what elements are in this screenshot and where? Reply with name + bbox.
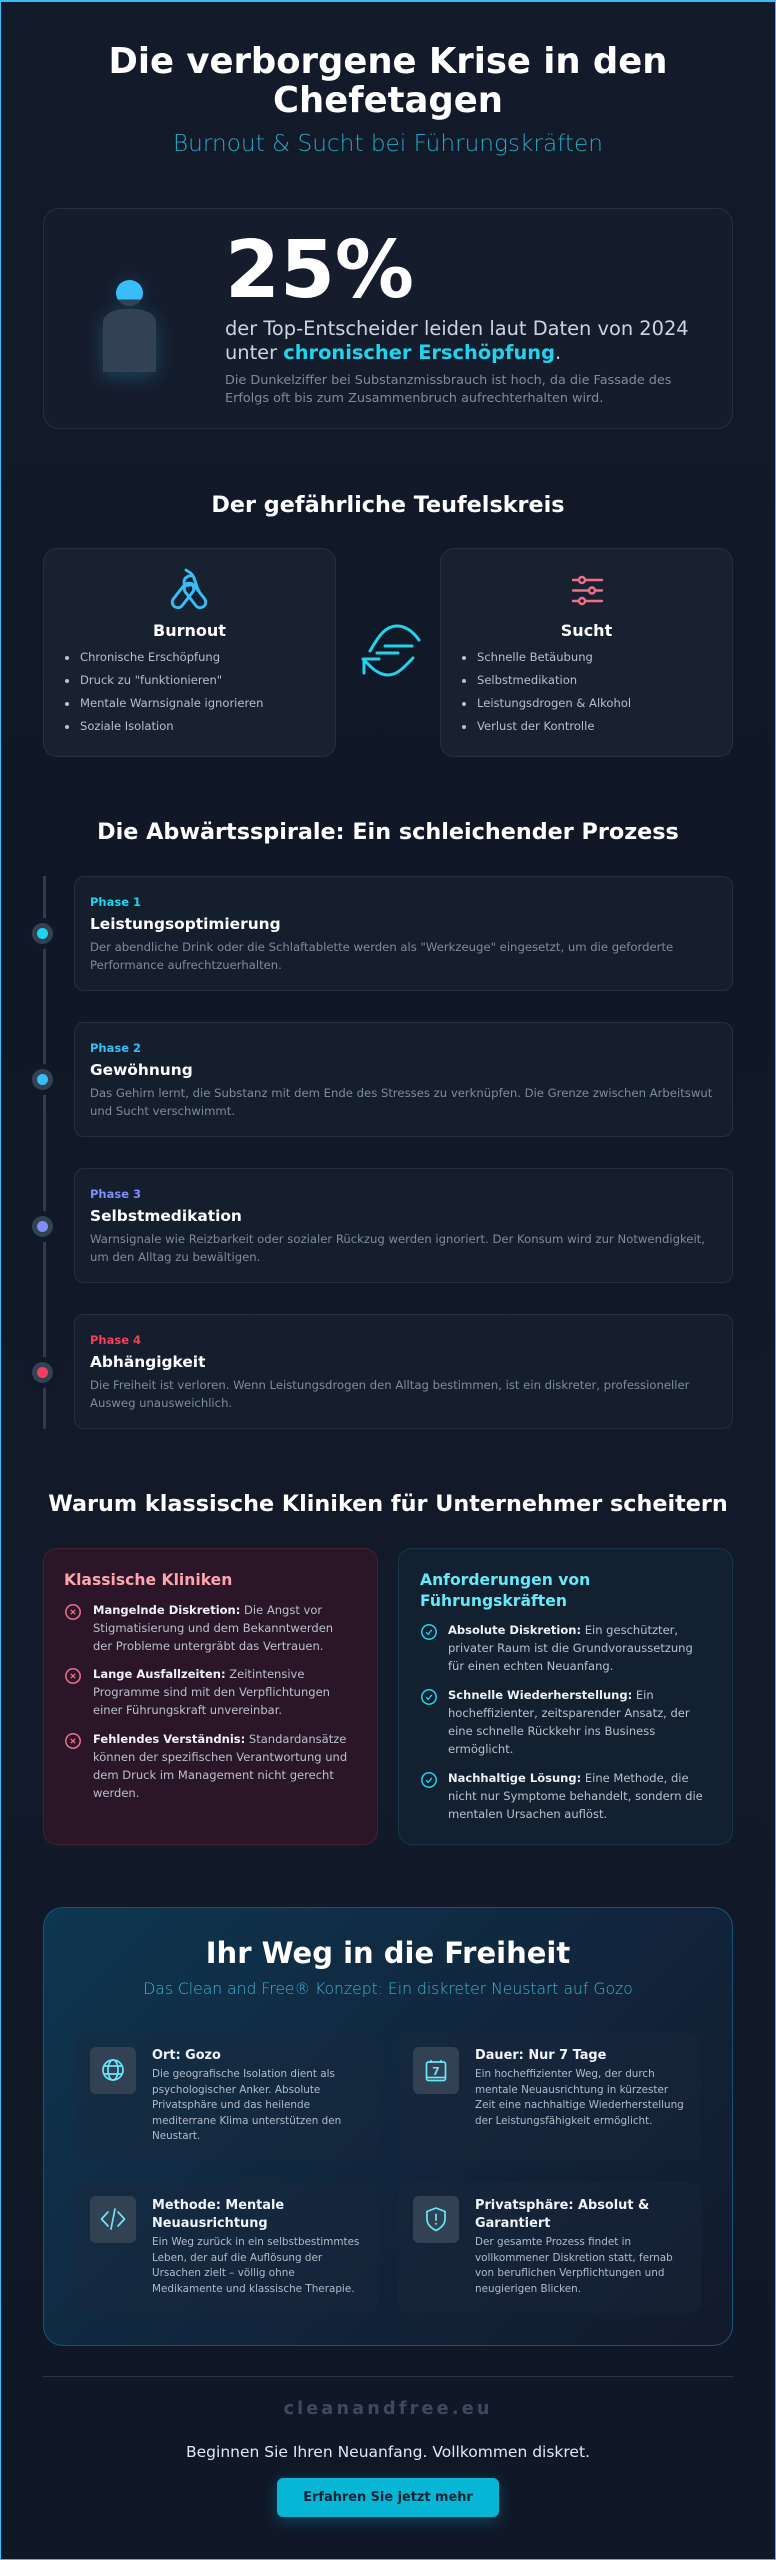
item: Diskretion: Mangelnde Diskretion: Die Angst vor [93, 1603, 322, 1617]
item: Diskretion: privater Raum ist die Grundvoraussetzung [448, 1641, 693, 1655]
Dauer text [475, 2068, 684, 2126]
item: Diskretion: Absolute Diskretion: Ein geschützter, [448, 1623, 678, 1637]
Privatsphäre title: Garantiert [475, 2216, 550, 2231]
panel: phase 2 [74, 1022, 733, 1137]
statistic text [225, 317, 689, 364]
heading: Abwärtsspirale: Die Abwärtsspirale: Ein schleichender Prozess [97, 819, 679, 845]
title [109, 41, 667, 120]
Methode title: Methode: Mentale [152, 2198, 284, 2213]
panel: hero statistic [43, 208, 733, 429]
panel: phase 3 [74, 1168, 733, 1283]
classic clinics title: Klassische Kliniken [64, 1571, 232, 1589]
icon: calendar [413, 2047, 459, 2094]
panel: classic clinics [43, 1548, 378, 1845]
footer tagline: Beginnen Sie Ihren Neuanfang. Vollkommen diskret. [186, 2443, 590, 2461]
icon: check [421, 1689, 437, 1705]
icon: cycle arrows [362, 624, 421, 676]
item: Diskretion: der Probleme untergräbt das Vertrauen. [93, 1639, 323, 1653]
icon: check [421, 1624, 437, 1640]
phase 3 text: Warnsignale wie Reizbarkeit oder sozialer Rückzug werden ignoriert. Der Konsum wird zur Notwendigkeit, [90, 1232, 705, 1246]
footer brand: cleanandfree.eu [283, 2399, 493, 2419]
phase 2 title: Gewöhnung [90, 1061, 193, 1079]
requirements title: Anforderungen von [420, 1571, 590, 1589]
requirements title: Führungskräften [420, 1592, 567, 1610]
Methode title: Neuausrichtung [152, 2216, 268, 2231]
item: Diskretion [65, 1603, 333, 1653]
phase 4 text: Die Freiheit ist verloren. Wenn Leistungsdrogen den Alltag bestimmen, ist ein diskreter, professioneller [90, 1378, 689, 1392]
phase 3 text: um den Alltag zu bewältigen. [90, 1250, 260, 1264]
item: Diskretion: für einen echten Neuanfang. [448, 1659, 613, 1673]
panel: sucht [440, 548, 733, 757]
icon: burnout [170, 568, 208, 610]
phase 4 text: Ausweg unausweichlich. [90, 1396, 232, 1410]
statistic note: Die Dunkelziffer bei Substanzmissbrauch ist hoch, da die Fassade des [225, 373, 671, 388]
big number: 25% [225, 224, 414, 316]
item: Lösung: mentalen Ursachen auflöst. [448, 1807, 607, 1821]
burnout title: Burnout [153, 621, 226, 640]
icon: shield [413, 2196, 459, 2243]
item: Verständnis: Fehlendes Verständnis: Standardansätze [93, 1732, 346, 1746]
heading: Teufelskreis: Der gefährliche Teufelskreis [211, 492, 565, 518]
item: Lösung [421, 1771, 703, 1821]
sucht list [462, 650, 631, 733]
phase 4 title: Abhängigkeit [90, 1353, 205, 1371]
sucht list: Schnelle Betäubung [477, 650, 593, 664]
Ort text: Die geografische Isolation dient als [152, 2068, 335, 2080]
sucht title: Sucht [561, 621, 612, 640]
burnout list: Chronische Erschöpfung [80, 650, 220, 664]
node: phase 1 [32, 923, 53, 944]
statistic note: Erfolgs oft bis zum Zusammenbruch aufrechterhalten wird. [225, 391, 603, 406]
icon: code [90, 2196, 136, 2243]
item: Lösung: Nachhaltige Lösung: Eine Methode, die [448, 1771, 689, 1785]
Ort title: Ort: Gozo [152, 2048, 221, 2063]
item: Wiederherstellung: Schnelle Wiederherstellung: Ein [448, 1688, 654, 1702]
item: Verständnis: können der spezifischen Verantwortung und [93, 1750, 347, 1764]
Dauer text: Zeit eine nachhaltige Wiederherstellung [475, 2099, 684, 2111]
feature: Privatsphäre [398, 2182, 701, 2313]
item: Ausfallzeiten: Lange Ausfallzeiten: Zeitintensive [93, 1667, 304, 1681]
item: Ausfallzeiten: Programme sind mit den Verpflichtungen [93, 1685, 330, 1699]
panel: burnout [43, 548, 336, 757]
item: Lösung: nicht nur Symptome behandelt, sondern die [448, 1789, 703, 1803]
sucht list: Selbstmedikation [477, 673, 577, 687]
panel: phase 1 [74, 876, 733, 991]
item: Verständnis: werden. [93, 1786, 139, 1800]
statistic note [225, 373, 671, 406]
burnout list [65, 650, 263, 733]
Privatsphäre text: neugierigen Blicken. [475, 2282, 581, 2294]
statistic text: unter chronischer Erschöpfung. [225, 341, 561, 364]
phase 3 text [90, 1232, 705, 1264]
Privatsphäre text: von beruflichen Verpflichtungen und [475, 2267, 664, 2279]
timeline [32, 876, 53, 1429]
panel: phase 4 [74, 1314, 733, 1429]
icon: sliders [572, 576, 604, 606]
feature: Dauer [398, 2033, 701, 2161]
Methode title [152, 2198, 284, 2231]
Methode text: Leben, der auf die Auflösung der [152, 2252, 322, 2264]
Privatsphäre title: Privatsphäre: Absolut & [475, 2198, 649, 2213]
heading: Kliniken: Warum klassische Kliniken für Unternehmer scheitern [48, 1491, 728, 1517]
icon: calendar: 7 [432, 2065, 440, 2078]
Ort text: psychologischer Anker. Absolute [152, 2084, 320, 2096]
sucht list: Leistungsdrogen & Alkohol [477, 696, 631, 710]
Privatsphäre text: vollkommener Diskretion statt, fernab [475, 2252, 673, 2264]
freedom title: Ihr Weg in die Freiheit [206, 1936, 570, 1970]
item: Wiederherstellung: ermöglicht. [448, 1742, 513, 1756]
Ort text: mediterrane Klima unterstützen den [152, 2114, 341, 2126]
Dauer title: Dauer: Nur 7 Tage [475, 2048, 606, 2063]
subtitle: Burnout & Sucht bei Führungskräften [173, 130, 603, 157]
item: Diskretion [421, 1623, 693, 1673]
item: Wiederherstellung: eine schnelle Rückkehr ins Business [448, 1724, 655, 1738]
Methode text: Ein Weg zurück in ein selbstbestimmtes [152, 2236, 359, 2248]
button: CTA [277, 2478, 499, 2517]
node: phase 3 [32, 1216, 53, 1237]
phase 1 label: Phase 1 [90, 895, 141, 909]
title: Chefetagen [273, 80, 503, 120]
icon: glowing person [94, 278, 164, 384]
phase 1 title: Leistungsoptimierung [90, 915, 281, 933]
phase 2 label: Phase 2 [90, 1041, 141, 1055]
node: phase 4 [32, 1362, 53, 1383]
sucht list: Verlust der Kontrolle [477, 719, 594, 733]
item: Ausfallzeiten [65, 1667, 330, 1717]
button: CTA: Erfahren Sie jetzt mehr [303, 2490, 473, 2505]
phase 2 text [90, 1086, 712, 1118]
Dauer text: Ein hocheffizienter Weg, der durch [475, 2068, 655, 2080]
phase 4 text [90, 1378, 690, 1410]
item: Diskretion: Stigmatisierung und dem Bekanntwerden [93, 1621, 333, 1635]
Dauer text: mentale Neuausrichtung in kürzester [475, 2084, 668, 2096]
node: phase 2 [32, 1069, 53, 1090]
requirements title [420, 1571, 590, 1610]
Privatsphäre title [475, 2198, 649, 2231]
item: Ausfallzeiten: einer Führungskraft unvereinbar. [93, 1703, 282, 1717]
panel: path to freedom [43, 1907, 733, 2346]
item: Verständnis [65, 1732, 347, 1800]
feature: Methode [75, 2182, 378, 2313]
phase 1 text: Performance aufrechtzuerhalten. [90, 958, 282, 972]
phase 1 text [90, 940, 673, 972]
feature: Ort [75, 2033, 378, 2161]
Dauer text: der Leistungsfähigkeit ermöglicht. [475, 2114, 653, 2126]
Privatsphäre text: Der gesamte Prozess findet in [475, 2236, 631, 2248]
Methode text: Ursachen zielt – völlig ohne [152, 2267, 295, 2279]
item: Verständnis: dem Druck im Management nicht gerecht [93, 1768, 334, 1782]
burnout list: Druck zu "funktionieren" [80, 673, 222, 687]
icon: cross [65, 1604, 81, 1620]
phase 1 text: Der abendliche Drink oder die Schlaftablette werden als "Werkzeuge" eingesetzt, um die geforderte [90, 940, 673, 954]
burnout list: Mentale Warnsignale ignorieren [80, 696, 263, 710]
Ort text [152, 2068, 341, 2142]
icon: cross [65, 1733, 81, 1749]
title: Die verborgene Krise in den [109, 41, 667, 82]
burnout list: Soziale Isolation [80, 719, 174, 733]
Ort text: Neustart. [152, 2130, 200, 2142]
phase 2 text: und Sucht verschwimmt. [90, 1104, 235, 1118]
statistic text: der Top-Entscheider leiden laut Daten von 2024 [225, 317, 689, 340]
Ort text: Privatsphäre und das heilende [152, 2099, 310, 2111]
icon: cross [65, 1668, 81, 1684]
phase 4 label: Phase 4 [90, 1333, 141, 1347]
Methode text [152, 2236, 359, 2294]
Privatsphäre text [475, 2236, 673, 2294]
Methode text: Medikamente und klassische Therapie. [152, 2282, 355, 2294]
icon: check [421, 1772, 437, 1788]
item: Wiederherstellung [421, 1688, 690, 1756]
phase 2 text: Das Gehirn lernt, die Substanz mit dem Ende des Stresses zu verknüpfen. Die Grenze zwischen Arbeitswut [90, 1086, 712, 1100]
phase 3 label: Phase 3 [90, 1187, 141, 1201]
item: Wiederherstellung: hocheffizienter, zeitsparender Ansatz, der [448, 1706, 690, 1720]
icon: globe [90, 2047, 136, 2094]
phase 3 title: Selbstmedikation [90, 1207, 242, 1225]
panel: executive requirements [398, 1548, 733, 1845]
freedom subtitle: Das Clean and Free® Konzept: Ein diskreter Neustart auf Gozo [143, 1980, 633, 1998]
